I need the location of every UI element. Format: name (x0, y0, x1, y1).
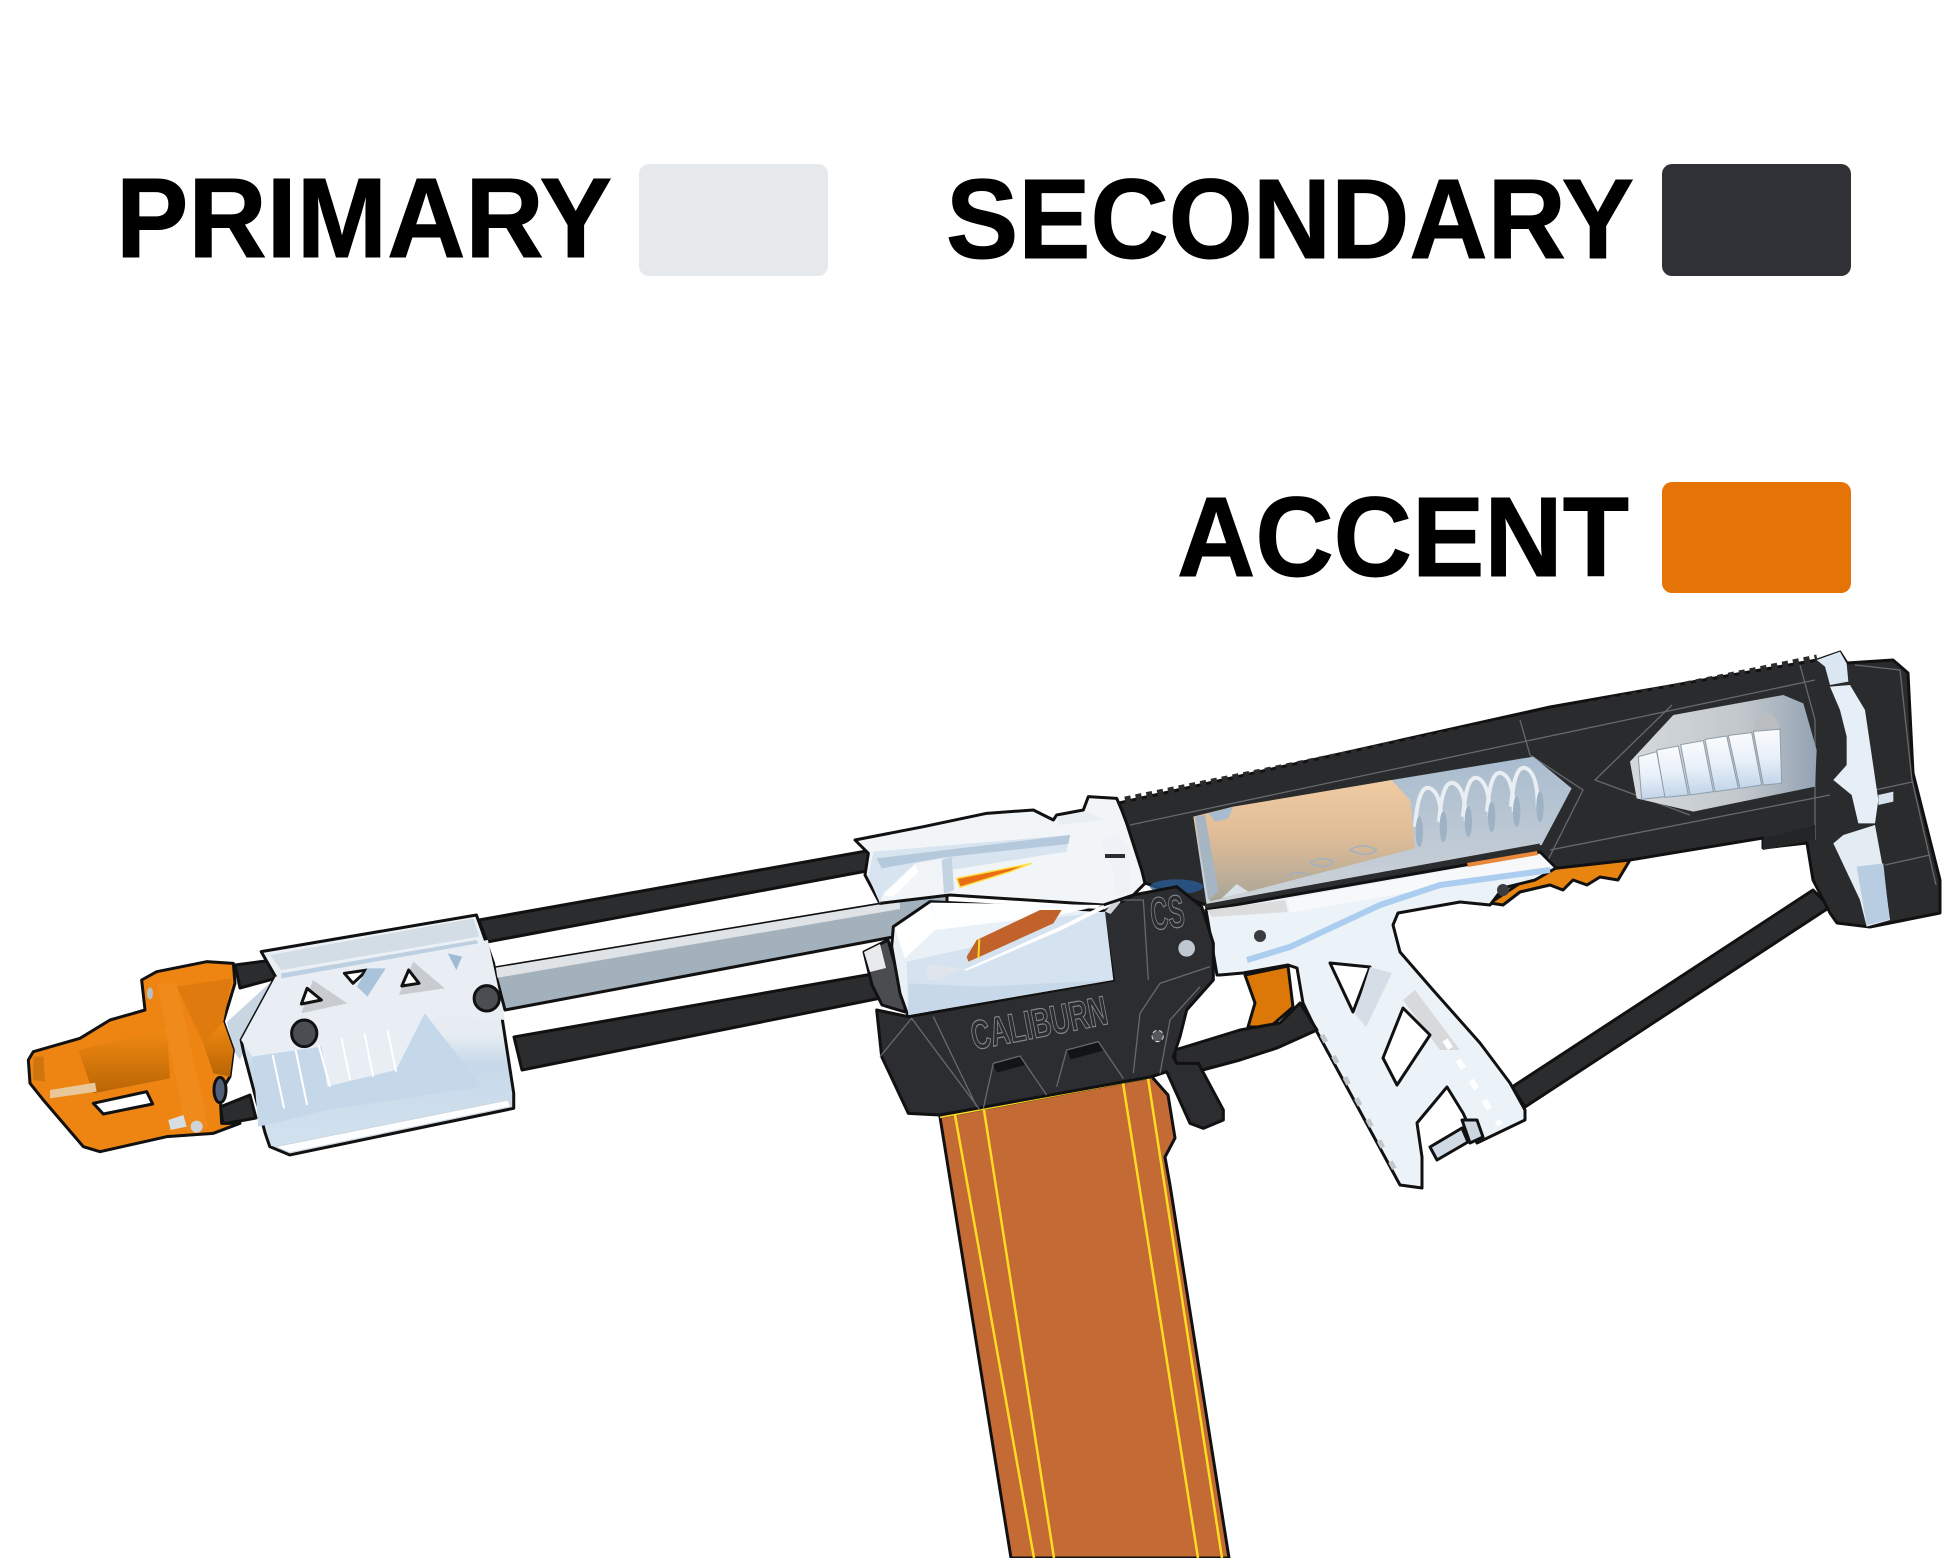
legend: secondary colour (946, 156, 1851, 282)
label: primary: PRIMARY (116, 155, 612, 281)
screws (292, 1020, 317, 1047)
legend: primary colour (116, 155, 828, 281)
engraved text: CS: CS (1148, 885, 1187, 940)
rear upper section (855, 797, 1145, 905)
legend: accent colour (1177, 474, 1851, 600)
rear spring window and primary stock inserts (1630, 652, 1893, 927)
illustration: blaster in three colours (28, 652, 1940, 1558)
muzzle: orange (28, 962, 240, 1152)
rear stock: secondary (1119, 652, 1940, 927)
swatch: primary (639, 164, 828, 276)
handguard: primary white (241, 915, 514, 1155)
pistol grip and lower rail: primary white with accent teeth (1206, 851, 1630, 1188)
trigger guard: secondary (1175, 1003, 1317, 1085)
trigger: accent (1245, 966, 1293, 1027)
swatch: accent (1662, 482, 1851, 593)
front lower section (892, 902, 1113, 1017)
barrel and guide rods (220, 850, 947, 1124)
vents (301, 953, 462, 1013)
support strut (1512, 890, 1830, 1107)
label: accent: ACCENT (1177, 474, 1629, 600)
engraved text: CALIBURN: CALIBURN (967, 987, 1111, 1059)
label: secondary: SECONDARY (946, 156, 1634, 282)
magazine: accent (940, 1077, 1229, 1558)
upper receiver: primary white (855, 797, 1145, 1017)
lower receiver: secondary (877, 887, 1223, 1128)
air chamber window with tan plunger and spring (1150, 757, 1572, 907)
swatch: secondary (1662, 164, 1851, 276)
